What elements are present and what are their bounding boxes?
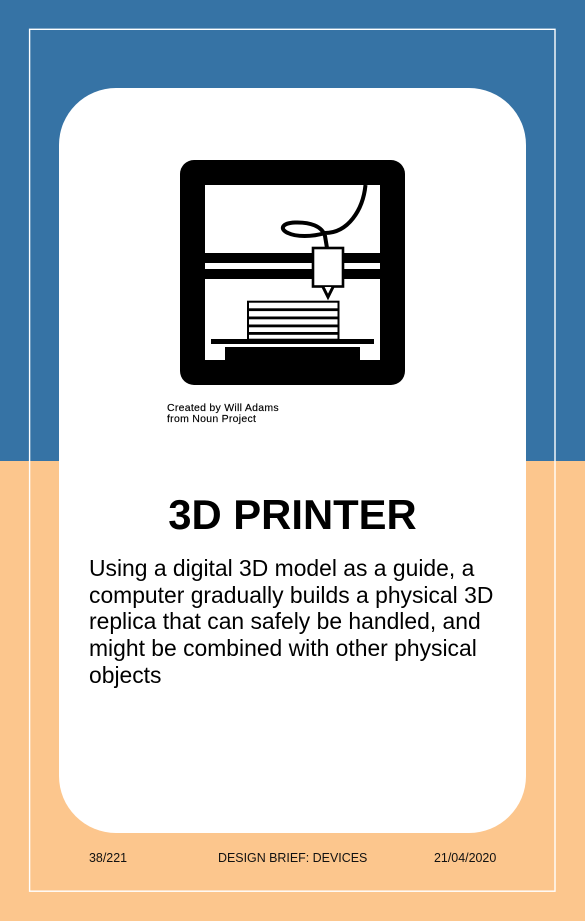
description text: Using a digital 3D model as a guide, a bbox=[89, 555, 474, 581]
icon credit: Created by Will Adams bbox=[167, 402, 279, 414]
description text: replica that can safely be handled, and bbox=[89, 608, 481, 634]
title: 3D PRINTER bbox=[168, 491, 417, 538]
footer: page number: 38/221 bbox=[89, 851, 127, 865]
background: orange lower band bbox=[0, 461, 585, 921]
icon credit: from Noun Project bbox=[167, 413, 256, 425]
description text: objects bbox=[89, 662, 161, 688]
footer: section title: DESIGN BRIEF: DEVICES bbox=[218, 851, 367, 865]
icon credit bbox=[167, 402, 279, 425]
footer: date: 21/04/2020 bbox=[434, 851, 496, 865]
panel: white card bbox=[59, 88, 526, 833]
description text bbox=[89, 555, 493, 688]
description text: computer gradually builds a physical 3D bbox=[89, 582, 493, 608]
description text: might be combined with other physical bbox=[89, 635, 477, 661]
